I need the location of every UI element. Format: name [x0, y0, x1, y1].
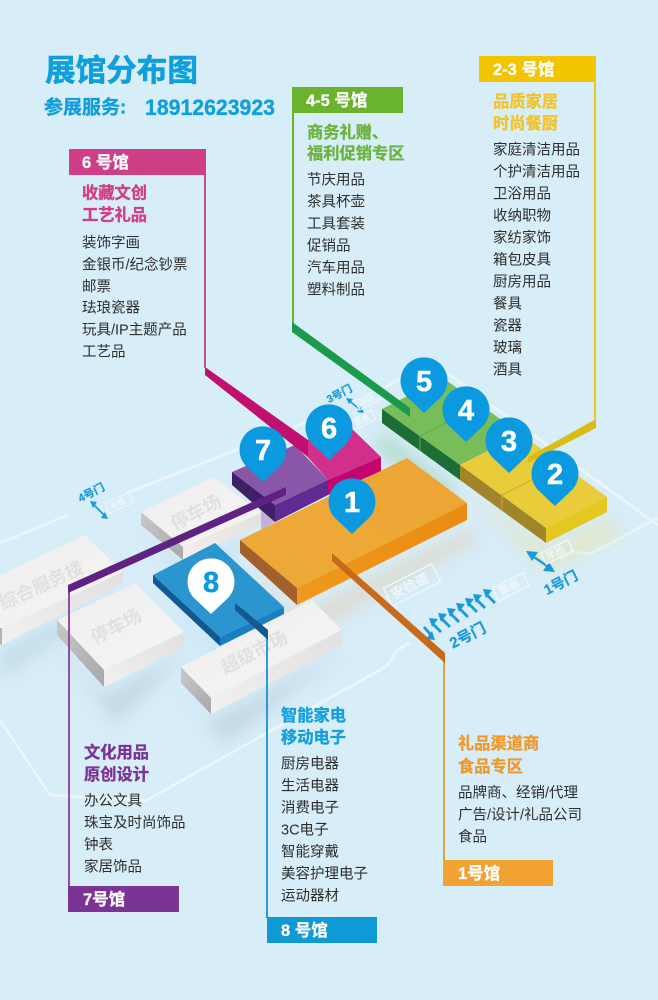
pin 6 — [306, 404, 352, 460]
building: 超级市场 — [181, 600, 342, 714]
panel: halls 4-5: 4-5 号馆 — [306, 90, 367, 110]
panel: halls 2-3 — [479, 56, 596, 463]
phone line — [44, 95, 275, 120]
panel: hall 6: 工艺品 — [82, 344, 126, 360]
panel: halls 2-3: 箱包皮具 — [493, 252, 551, 268]
panel: halls 2-3: 卫浴用品 — [493, 186, 551, 202]
pin 5 — [400, 357, 448, 413]
title: 展馆分布图 — [45, 54, 198, 88]
pin 8: 8 — [203, 567, 219, 599]
pin 2: 2 — [547, 459, 563, 491]
panel: halls 2-3: 个护清洁用品 — [493, 164, 580, 180]
panel: halls 2-3: 时尚餐厨 — [493, 114, 558, 133]
panel: hall 6: 邮票 — [82, 278, 111, 296]
panel: hall 7: 原创设计 — [84, 766, 149, 784]
gate 3 — [325, 382, 381, 430]
panel: hall 7: 钟表 — [84, 836, 113, 854]
panel: halls 4-5: 福利促销专区 — [307, 145, 404, 163]
panel: hall 7: 珠宝及时尚饰品 — [84, 814, 186, 832]
gate 3: 3号门 — [325, 382, 354, 406]
pin 1 — [328, 478, 376, 534]
panel: halls 2-3: 酒具 — [493, 362, 522, 378]
hall 6 block — [297, 422, 381, 495]
phone line: 18912623923 — [145, 95, 275, 120]
panel: halls 4-5: 促销品 — [307, 238, 350, 254]
phone line: 参展服务: — [44, 96, 126, 118]
pin 3: 3 — [501, 426, 517, 458]
panel: hall 8: 智能家电 — [281, 706, 346, 725]
panel: hall 1: 礼品渠道商 — [458, 734, 539, 753]
gate 1: 1号门 — [541, 567, 580, 598]
building: 停车场 south: 停车场 — [87, 604, 145, 648]
panel: halls 2-3: 家庭清洁用品 — [493, 142, 580, 158]
panel: hall 7 — [68, 487, 286, 912]
pin 5: 5 — [416, 366, 432, 398]
panel: hall 8: 消费电子 — [281, 800, 339, 816]
gate 3: 年检 — [357, 392, 376, 408]
panel: halls 2-3: 餐具 — [493, 296, 522, 312]
panel: hall 8: 厨房电器 — [281, 756, 339, 772]
site roads — [0, 373, 658, 801]
panel: hall 8: 美容护理电子 — [281, 866, 368, 882]
panel: hall 7: 家居饰品 — [84, 858, 142, 876]
building: 停车场 north — [141, 477, 261, 560]
panel: halls 2-3: 品质家居 — [493, 92, 558, 111]
building: 停车场 north: 停车场 — [167, 490, 225, 534]
halls 4-5 block — [382, 378, 521, 480]
gate 2 — [383, 564, 529, 652]
gate 2: 安检道 — [388, 569, 432, 602]
panel: hall 1: 广告/设计/礼品公司 — [458, 806, 582, 824]
pin 7: 7 — [255, 435, 271, 467]
pin 3 — [486, 417, 532, 473]
gate 2: 2号门 — [447, 619, 489, 652]
panel: hall 8: 智能穿戴 — [281, 844, 339, 860]
pin 4: 4 — [458, 395, 474, 427]
halls 2-3 block — [460, 434, 607, 543]
gate 1 — [526, 540, 580, 598]
panel: hall 8: 8 号馆 — [281, 920, 328, 940]
panel: halls 2-3: 厨房用品 — [493, 274, 551, 290]
gate 4: 4号门 — [75, 480, 107, 505]
panel: halls 4-5: 汽车用品 — [307, 260, 365, 276]
panel: hall 6: 金银币/纪念钞票 — [82, 256, 188, 274]
gate 2: 票务 — [496, 576, 522, 599]
panel: hall 8: 生活电器 — [281, 778, 339, 794]
pin 6: 6 — [321, 413, 337, 445]
gate 1: 年检 — [544, 543, 567, 563]
panel: halls 4-5: 节庆用品 — [307, 172, 365, 188]
panel: hall 6: 6 号馆 — [82, 152, 129, 172]
panel: hall 6 — [69, 149, 308, 457]
building: 超级市场: 超级市场 — [217, 627, 291, 678]
hall 1 block — [240, 458, 467, 605]
pin 1: 1 — [344, 487, 360, 519]
hall 8 block — [153, 543, 284, 646]
panel: halls 2-3: 瓷器 — [493, 318, 522, 334]
gate 3: 票务 — [352, 412, 371, 428]
building shadows — [0, 430, 620, 745]
panel: halls 4-5: 商务礼赠、 — [307, 123, 388, 142]
hall 7 block — [232, 445, 328, 530]
panel: hall 6: 装饰字画 — [82, 234, 140, 252]
panel: hall 7: 办公文具 — [84, 792, 142, 810]
panel: hall 1: 1号馆 — [458, 863, 500, 883]
gate 4 — [75, 480, 133, 519]
panel: halls 2-3: 收纳职物 — [493, 208, 551, 224]
panel: halls 4-5: 茶具杯壶 — [307, 194, 365, 210]
panel: hall 8: 移动电子 — [281, 728, 346, 747]
panel: hall 8 — [235, 603, 377, 943]
panel: halls 4-5 — [292, 87, 410, 417]
panel: halls 2-3: 2-3 号馆 — [493, 59, 554, 79]
building: 综合服务楼 — [0, 535, 123, 645]
panel: hall 8: 运动器材 — [281, 888, 339, 904]
panel: hall 1 — [332, 553, 582, 886]
pin 2 — [532, 450, 578, 506]
panel: hall 1: 食品专区 — [458, 757, 523, 776]
panel: hall 7: 7号馆 — [83, 889, 125, 909]
pin 7 — [240, 426, 286, 482]
panel: halls 2-3: 家纺家饰 — [493, 230, 551, 246]
panel: hall 6: 珐琅瓷器 — [82, 300, 140, 316]
panel: halls 2-3: 玻璃 — [493, 340, 522, 356]
panel: halls 4-5: 塑料制品 — [307, 282, 365, 298]
panel: hall 6: 工艺礼品 — [82, 206, 147, 224]
panel: hall 8: 3C电子 — [281, 822, 329, 838]
panel: hall 7: 文化用品 — [84, 743, 149, 762]
panel: hall 1: 食品 — [458, 828, 487, 846]
gate 4: 年检 — [108, 495, 127, 511]
panel: hall 1: 品牌商、经销/代理 — [458, 784, 579, 802]
panel: hall 6: 收藏文创 — [82, 184, 147, 202]
panel: hall 6: 玩具/IP主题产品 — [82, 322, 187, 338]
building: 停车场 south — [57, 583, 184, 687]
panel: halls 4-5: 工具套装 — [307, 216, 365, 232]
pin 8 — [188, 558, 234, 614]
pin 4 — [442, 386, 490, 442]
